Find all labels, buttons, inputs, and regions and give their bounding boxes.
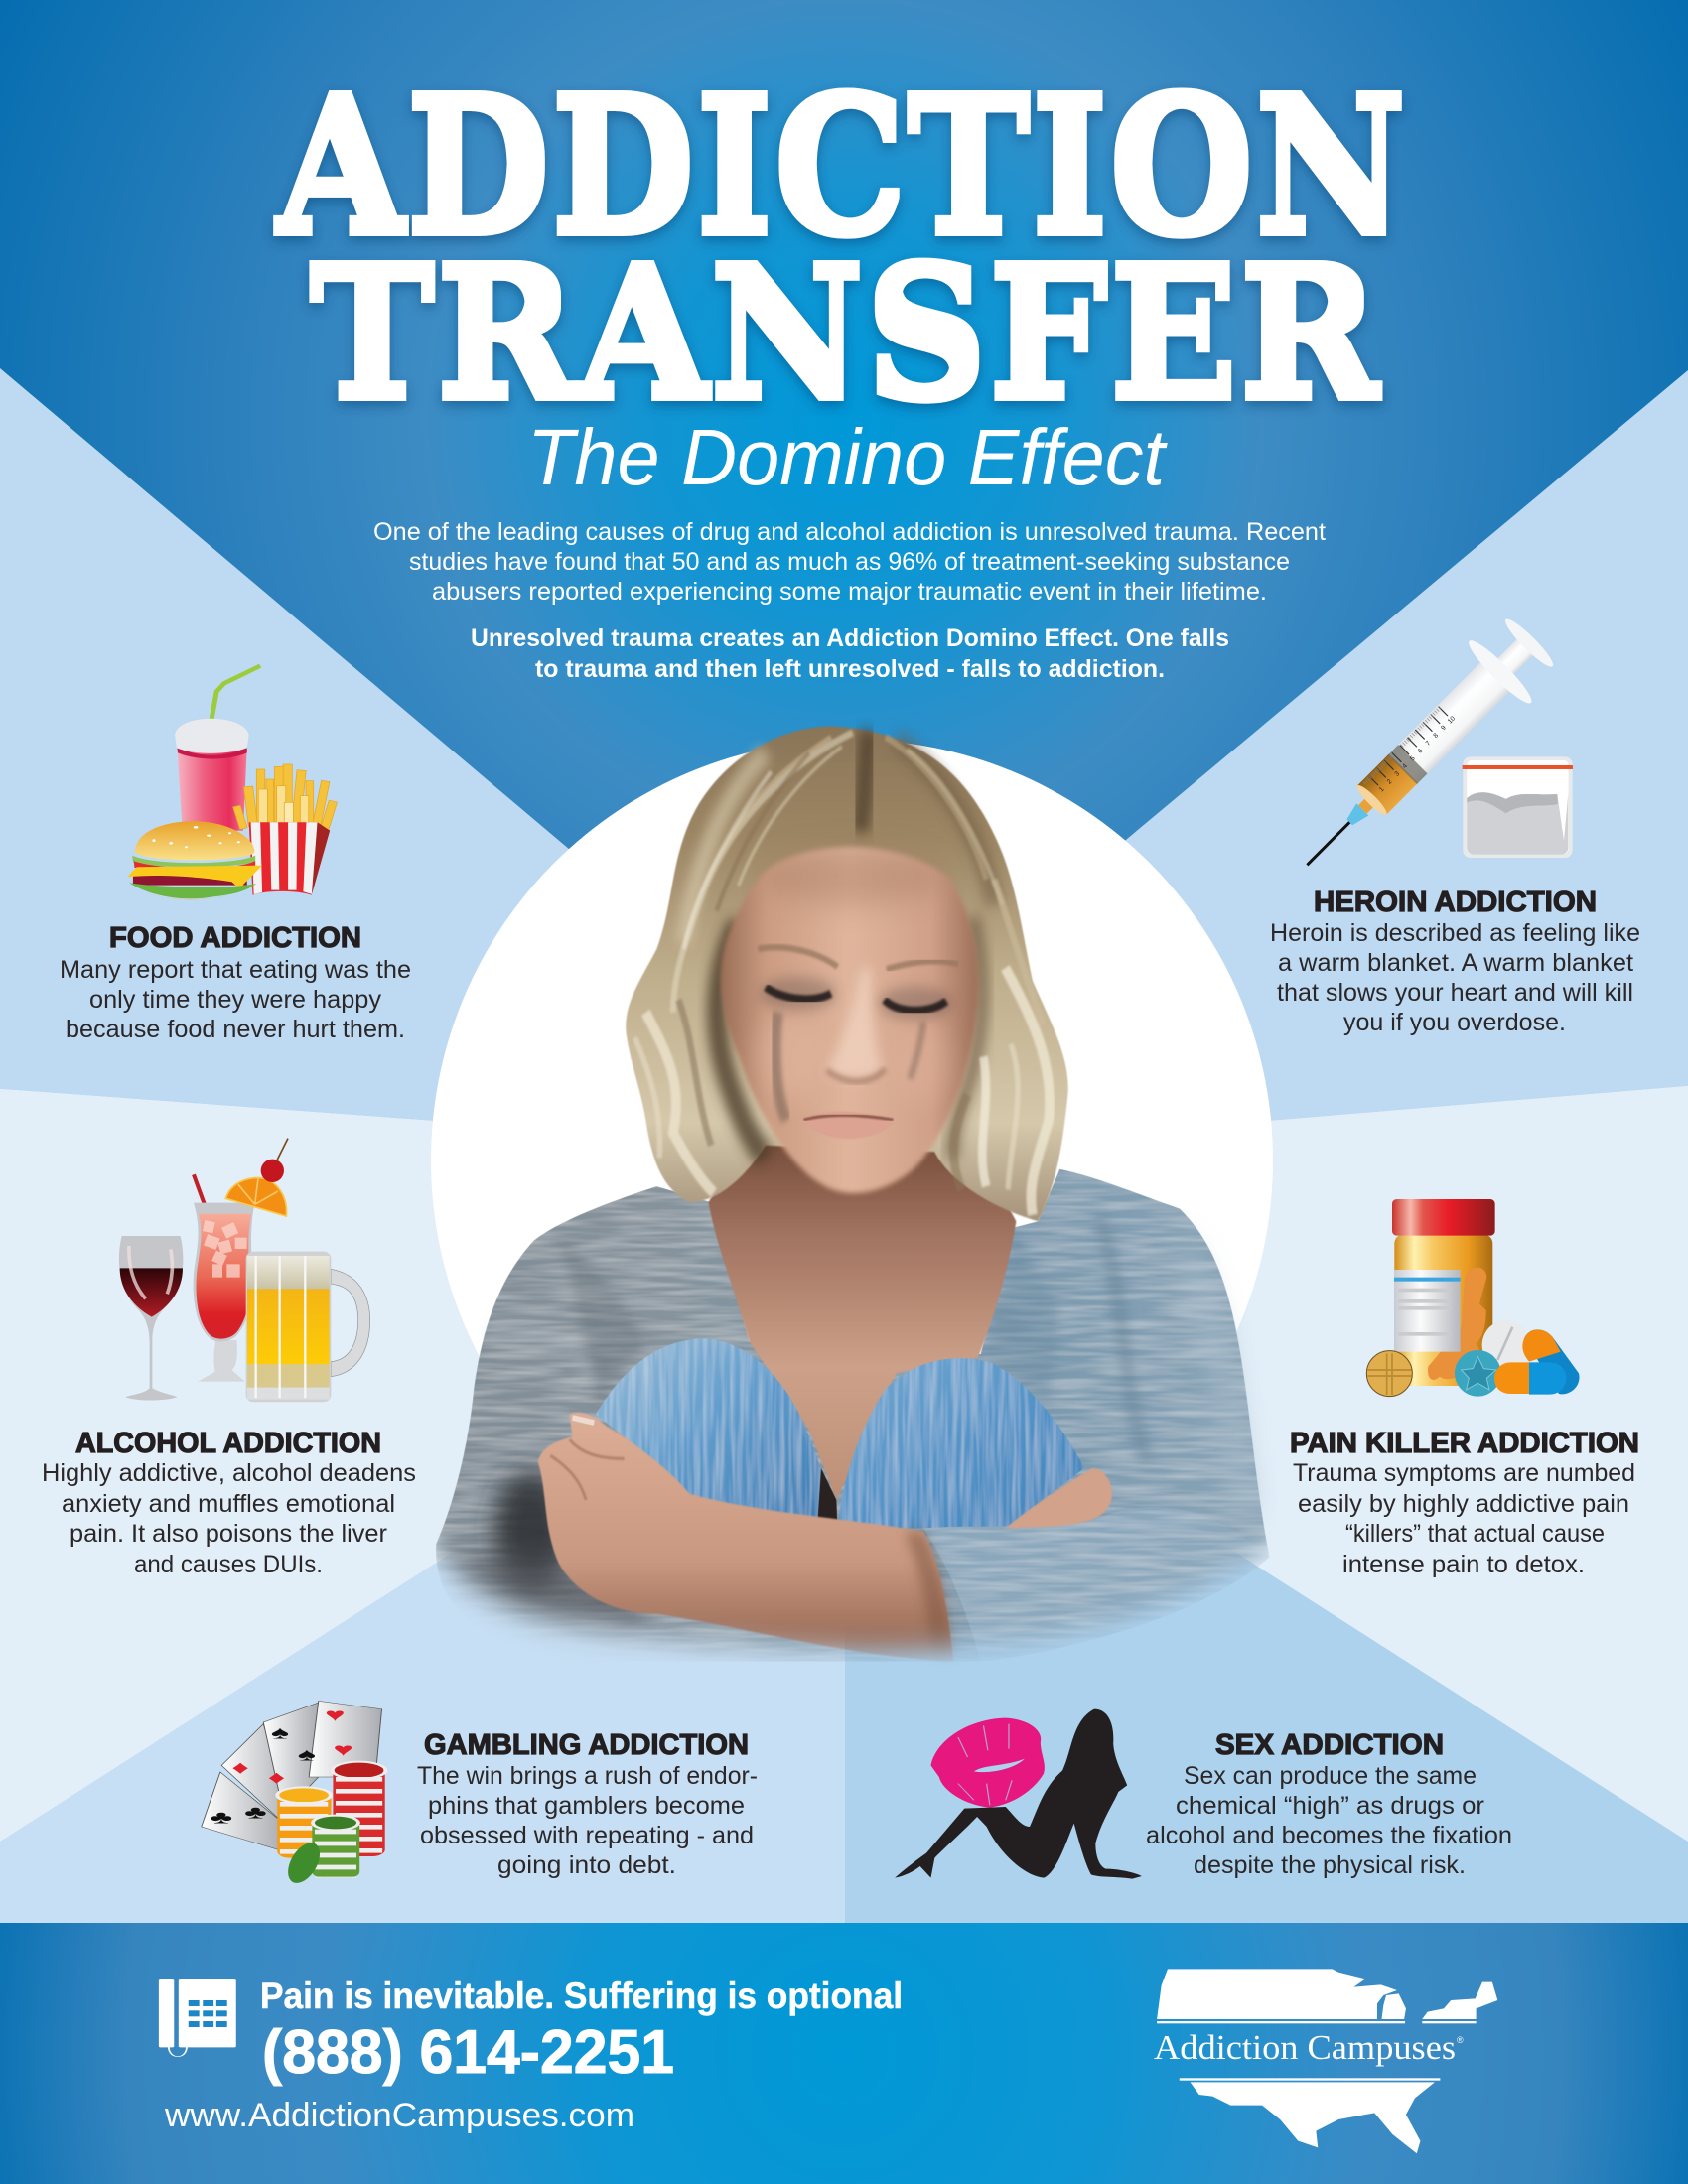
text: sex addiction: chemical “high” as drugs or — [1176, 1792, 1484, 1820]
heading: alcohol addiction: ALCOHOL ADDICTION — [75, 1428, 381, 1459]
intro text: One of the leading causes of drug and alcohol addiction is unresolved trauma. Recent — [373, 518, 1326, 546]
right hand — [1005, 1468, 1112, 1529]
left hand and forearm — [538, 1413, 953, 1662]
text: heroin addiction — [1270, 919, 1640, 1036]
text: alcohol addiction: anxiety and muffles emotional — [62, 1490, 395, 1518]
photo: crying woman hugging knees — [436, 726, 1269, 1662]
text: gambling addiction: obsessed with repeating - and — [420, 1822, 754, 1849]
panel: sex addiction — [895, 1709, 1512, 1879]
text: food addiction: only time they were happy — [89, 986, 381, 1014]
icon: syringe — [1276, 608, 1565, 895]
text: heroin addiction: that slows your heart and will kill — [1277, 979, 1633, 1007]
text: sex addiction: alcohol and becomes the fixation — [1146, 1822, 1512, 1849]
white circle — [431, 740, 1273, 1581]
panel: bottom right — [845, 1537, 1688, 1923]
text: heroin addiction: you if you overdose. — [1343, 1009, 1566, 1036]
hair — [626, 726, 1068, 1221]
text: pain killer addiction: “killers” that actual cause — [1345, 1520, 1605, 1548]
left knee — [596, 1338, 828, 1529]
icon: syringe: 7 — [1425, 740, 1432, 748]
panel: food addiction — [60, 666, 411, 1043]
panel: right middle — [1102, 1086, 1688, 1846]
text: sex addiction: Sex can produce the same — [1184, 1762, 1477, 1790]
heading: food addiction: FOOD ADDICTION — [109, 922, 361, 954]
sweater — [436, 1169, 1269, 1662]
icon: syringe: 1 — [1378, 786, 1386, 793]
icon: cards and chips: ♦ — [268, 1767, 285, 1788]
icon: silhouette with lipstick kiss — [895, 1709, 1142, 1879]
logo map: southern states — [1180, 2078, 1440, 2153]
right forearm sleeve — [923, 1507, 1191, 1646]
text: pain killer addiction — [1293, 1459, 1635, 1578]
icon: drinks — [119, 1139, 370, 1402]
bold intro text — [471, 624, 1229, 683]
icon: syringe: 9 — [1440, 724, 1448, 732]
text: alcohol addiction: and causes DUIs. — [134, 1551, 323, 1578]
panel: footer — [0, 1923, 1688, 2184]
text: pain killer addiction: intense pain to detox. — [1342, 1551, 1585, 1578]
panel: right upper — [1102, 370, 1688, 1135]
footer tagline: Pain is inevitable. Suffering is optional — [260, 1976, 903, 2016]
subtitle: The Domino Effect — [527, 413, 1168, 501]
icon: cards and chips: ♣ — [244, 1802, 267, 1823]
icon: syringe: 5 — [1409, 754, 1417, 762]
text: sex addiction — [1146, 1762, 1512, 1879]
icon: fast food — [127, 666, 337, 899]
text: alcohol addiction — [42, 1459, 416, 1578]
text: food addiction: Many report that eating was the — [60, 956, 411, 984]
bold intro text: Unresolved trauma creates an Addiction Domino Effect. One falls — [471, 624, 1229, 652]
icon: cards and chips: ♦ — [231, 1757, 249, 1778]
text: gambling addiction — [417, 1762, 758, 1879]
text: alcohol addiction: pain. It also poisons the liver — [70, 1520, 387, 1548]
icon: cards and chips — [202, 1701, 385, 1884]
icon: syringe: 4 — [1401, 762, 1409, 770]
text: alcohol addiction: Highly addictive, alcohol deadens — [42, 1459, 416, 1487]
panel: pain killer addiction — [1290, 1199, 1639, 1578]
text: gambling addiction: phins that gamblers become — [428, 1792, 745, 1820]
text: food addiction — [60, 956, 411, 1043]
panel: alcohol addiction — [42, 1139, 416, 1578]
icon: telephone — [159, 1979, 236, 2057]
intro text — [373, 518, 1326, 606]
heading: sex addiction: SEX ADDICTION — [1215, 1729, 1444, 1761]
icon: syringe: 2 — [1386, 778, 1394, 786]
bold intro text: to trauma and then left unresolved - falls to addiction. — [535, 655, 1165, 683]
icon: cards and chips: ♥ — [333, 1739, 353, 1759]
panel: bottom left — [0, 1537, 845, 1923]
title — [274, 57, 1407, 439]
icon: cards and chips: ♠ — [271, 1722, 289, 1743]
text: heroin addiction: a warm blanket. A warm blanket — [1278, 949, 1633, 977]
right knee — [837, 1358, 1084, 1529]
intro text: abusers reported experiencing some major traumatic event in their lifetime. — [432, 578, 1267, 606]
icon: cards and chips: ♣ — [211, 1807, 232, 1828]
heading: gambling addiction: GAMBLING ADDICTION — [424, 1729, 749, 1761]
text: food addiction: because food never hurt them. — [66, 1016, 405, 1043]
panel: gambling addiction — [202, 1701, 758, 1884]
text: pain killer addiction: easily by highly addictive pain — [1298, 1490, 1629, 1518]
title: TRANSFER — [309, 227, 1381, 439]
text: gambling addiction: going into debt. — [497, 1851, 676, 1879]
icon: cards and chips: ♥ — [325, 1705, 346, 1724]
panel: left middle — [0, 1089, 596, 1846]
logo: Addiction Campuses — [1154, 1969, 1497, 2153]
icon: cards and chips: ♠ — [298, 1744, 316, 1764]
website: www.AddictionCampuses.com — [164, 2097, 634, 2134]
panel: heroin addiction — [1270, 608, 1640, 1036]
heading: pain killer addiction: PAIN KILLER ADDICTION — [1290, 1428, 1639, 1459]
logo wordmark: Addiction Campuses — [1154, 2028, 1456, 2067]
heading: heroin addiction: HEROIN ADDICTION — [1314, 887, 1597, 918]
face — [721, 847, 978, 1193]
panel: left upper — [0, 368, 596, 1133]
text: heroin addiction: Heroin is described as feeling like — [1270, 919, 1640, 947]
text: gambling addiction: The win brings a rush of endor- — [417, 1762, 758, 1790]
top background — [0, 0, 1688, 993]
gap between knees — [818, 1468, 838, 1521]
neck and chest — [708, 1120, 1016, 1500]
intro text: studies have found that 50 and as much as 96% of treatment-seeking substance — [409, 548, 1290, 576]
text: pain killer addiction: Trauma symptoms are numbed — [1293, 1459, 1635, 1487]
phone number: (888) 614-2251 — [262, 2018, 674, 2087]
icon: syringe: 10 — [1447, 715, 1457, 726]
title: ADDICTION — [274, 57, 1407, 276]
text: sex addiction: despite the physical risk. — [1194, 1851, 1466, 1879]
logo registered mark: ® — [1457, 2035, 1464, 2045]
icon: pill bottle and pills — [1366, 1199, 1579, 1397]
icon: syringe: 8 — [1432, 732, 1440, 740]
icon: syringe: 6 — [1417, 748, 1425, 754]
icon: syringe: 3 — [1394, 770, 1401, 778]
icon: bag of powder — [1463, 756, 1573, 858]
logo map: northern states — [1157, 1969, 1497, 2023]
